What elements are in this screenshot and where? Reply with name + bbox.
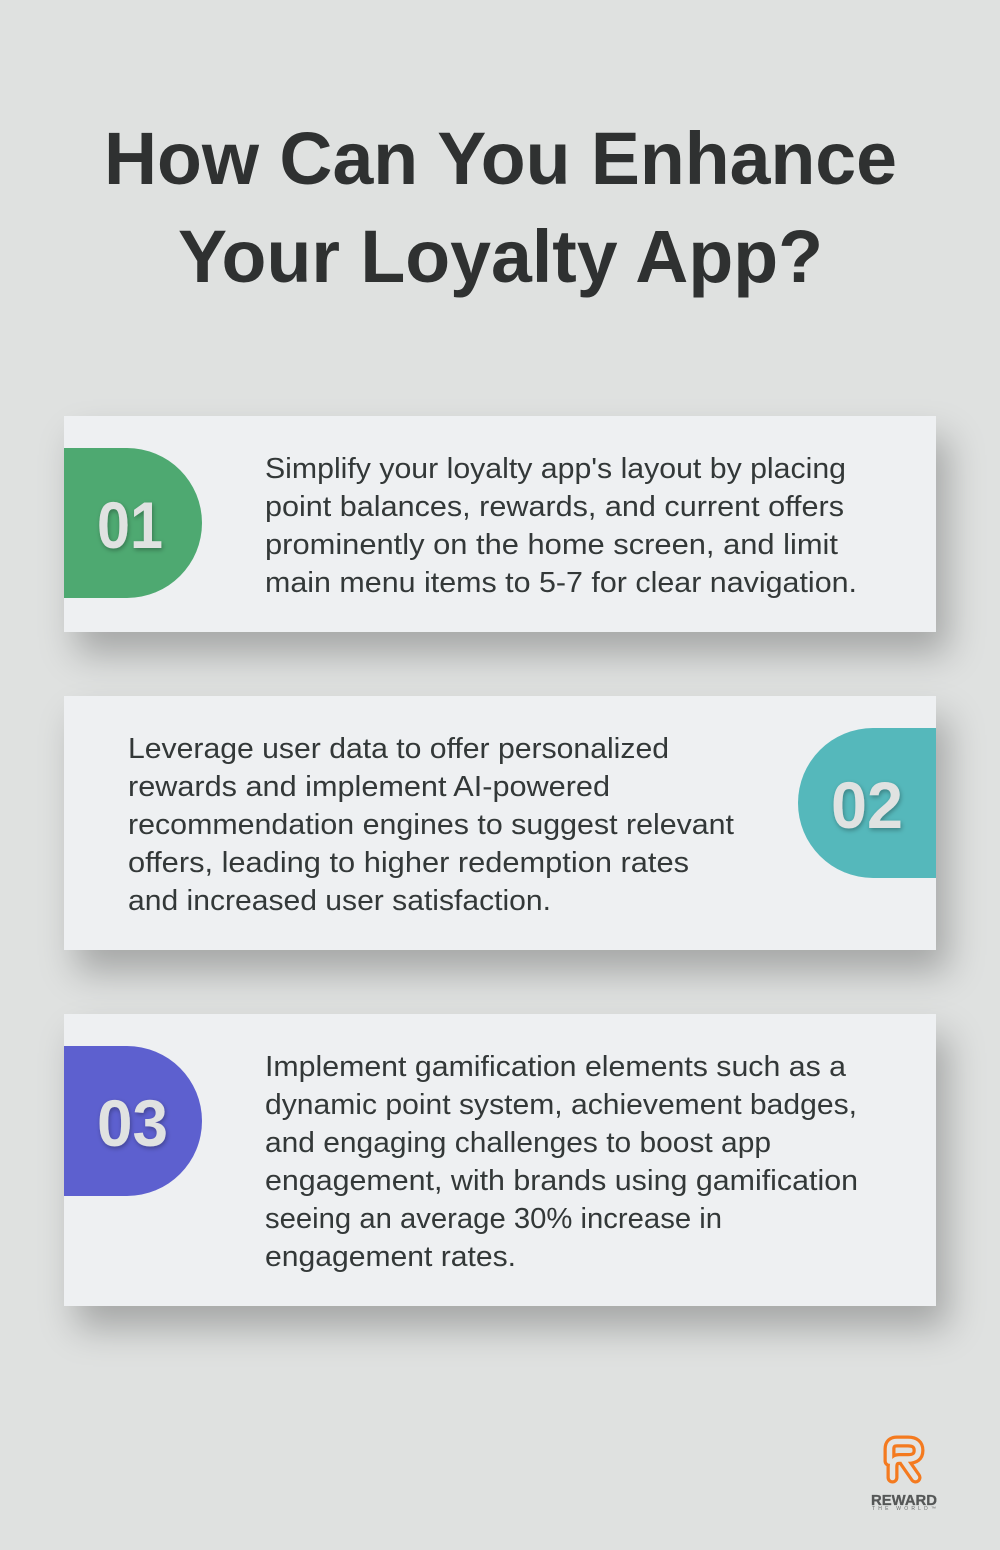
badge: 02: 02 <box>831 768 903 842</box>
badge: 01: 01 <box>97 488 163 562</box>
text: step 01 description: Simplify your loyalty app's layout by placing <box>265 453 846 485</box>
badge: 03: 03 <box>97 1086 168 1160</box>
badge: 02 <box>798 728 936 878</box>
logo: Reward the World: THE WORLD™ <box>872 1506 936 1512</box>
text: step 02 description: and increased user satisfaction. <box>128 885 551 917</box>
text: step 01 description: prominently on the home screen, and limit <box>265 529 838 561</box>
text: step 03 description: Implement gamification elements such as a <box>265 1051 847 1083</box>
text: step 02 description <box>128 733 734 917</box>
text: step 03 description: engagement, with brands using gamification <box>265 1165 858 1197</box>
text: step 03 description: dynamic point system, achievement badges, <box>265 1089 857 1121</box>
title <box>104 117 897 298</box>
panel: step 01 <box>64 416 936 632</box>
text: step 01 description <box>265 453 857 599</box>
text: step 03 description: engagement rates. <box>265 1241 516 1273</box>
title: How Can You Enhance <box>104 117 897 200</box>
panel: step 03 <box>64 1014 936 1306</box>
title: Your Loyalty App? <box>178 215 823 298</box>
text: step 03 description <box>265 1051 858 1273</box>
badge: 01 <box>64 448 202 598</box>
panel: step 02 <box>64 696 936 950</box>
badge: 03 <box>64 1046 202 1196</box>
text: step 02 description: recommendation engines to suggest relevant <box>128 809 734 841</box>
text: step 02 description: rewards and implement AI-powered <box>128 771 610 803</box>
text: step 02 description: offers, leading to higher redemption rates <box>128 847 689 879</box>
text: step 01 description: main menu items to 5-7 for clear navigation. <box>265 567 857 599</box>
text: step 03 description: and engaging challenges to boost app <box>265 1127 771 1159</box>
text: step 01 description: point balances, rewards, and current offers <box>265 491 844 523</box>
logo: Reward the World: REWARD <box>871 1492 937 1509</box>
text: step 03 description: seeing an average 30% increase in <box>265 1203 722 1235</box>
text: step 02 description: Leverage user data to offer personalized <box>128 733 669 765</box>
